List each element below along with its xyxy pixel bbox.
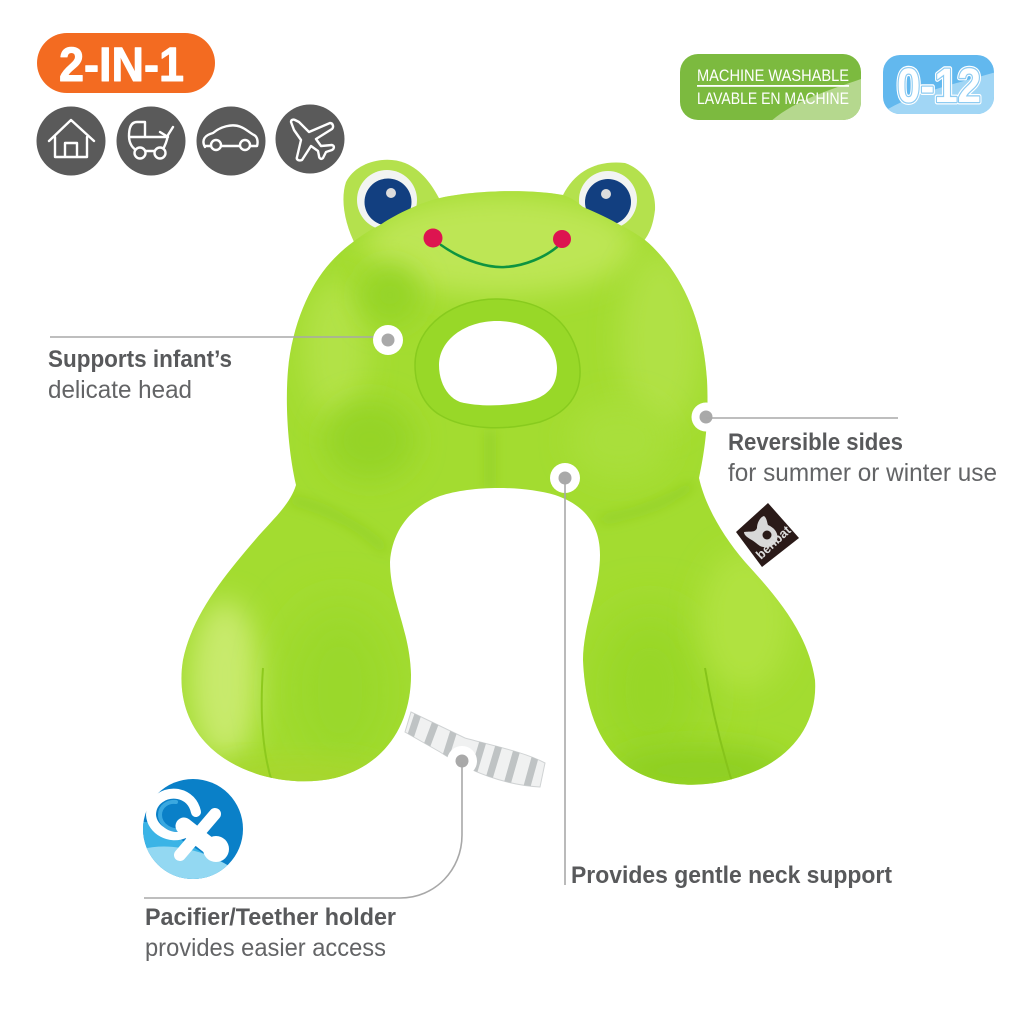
frog ear: left	[343, 160, 440, 246]
face: cheeks and smile	[424, 228, 571, 267]
icon: pacifier	[143, 779, 243, 879]
plush body	[170, 180, 830, 800]
badge: machine washable: LAVABLE EN MACHINE	[697, 89, 849, 108]
frog ear: right	[563, 163, 655, 242]
badge: age 0-12: 0-12	[897, 60, 981, 113]
icon: airplane	[276, 104, 344, 174]
callout: pacifier holder: Pacifier/Teether holder	[145, 904, 396, 931]
callout: reversible sides: Reversible sides	[728, 429, 903, 456]
badge: 2-in-1: 2-IN-1	[59, 39, 184, 92]
product: frog neck pillow	[170, 160, 830, 800]
badge: machine washable: MACHINE WASHABLE	[697, 66, 849, 85]
badge: machine washable	[680, 54, 864, 122]
callout: supports infant's delicate head: delicate head	[48, 376, 192, 404]
badge: 2-in-1	[37, 33, 215, 93]
callout: neck support	[550, 463, 892, 889]
callout: reversible sides: for summer or winter use	[728, 459, 997, 487]
callout: reversible sides	[692, 402, 997, 487]
pacifier strap	[405, 708, 545, 790]
icon: house	[36, 106, 106, 176]
brand tag: benbat: benbat	[753, 522, 794, 562]
brand tag: benbat	[736, 503, 799, 567]
badge: age 0-12: 0-12	[897, 60, 981, 113]
callout: pacifier holder: provides easier access	[145, 934, 386, 962]
callout: pacifier holder	[144, 746, 477, 962]
head opening ring	[415, 299, 580, 428]
badge: age 0-12: 0-12	[897, 60, 981, 113]
icon: car	[196, 106, 266, 176]
icon: stroller	[116, 106, 186, 176]
callout: supports infant's delicate head: Supports infant’s	[48, 346, 232, 373]
callout: neck support: Provides gentle neck support	[571, 862, 892, 889]
callout: supports infant's delicate head	[48, 325, 403, 404]
